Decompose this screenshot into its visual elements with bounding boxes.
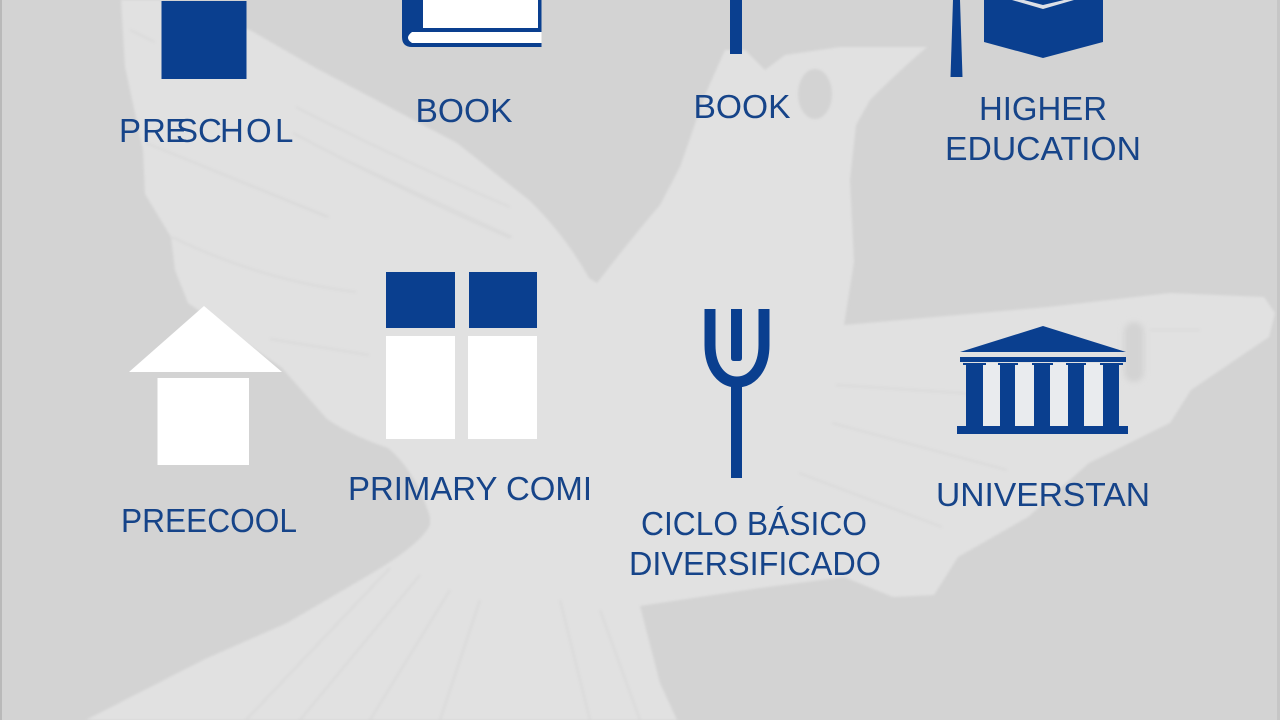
icon: book (402, 0, 542, 47)
icon: blue square (162, 1, 246, 79)
item: book center (694, 0, 790, 125)
icon: stem (730, 0, 742, 54)
label: preschool bottom: PREECOOL (121, 502, 297, 539)
dove eye (798, 69, 832, 119)
label: higher education: HIGHER (979, 90, 1107, 127)
label: university: UNIVERSTAN (936, 476, 1150, 513)
icon: graduation cap (950, 0, 1103, 77)
item: preschool top (119, 1, 293, 149)
item: preschool bottom (121, 306, 297, 539)
label: book: BOOK (416, 92, 512, 129)
item: ciclo basico: DIVERSIFICADO (629, 545, 881, 582)
item: ciclo basico (629, 309, 881, 582)
icon: open book blocks (386, 272, 537, 439)
item: book (402, 0, 542, 129)
label: book center: BOOK (694, 88, 790, 125)
icon: classical building (957, 326, 1128, 434)
dove wing shadow (1124, 322, 1144, 382)
icon: white house (129, 306, 282, 465)
label: ciclo basico: CICLO BÁSICO (641, 505, 867, 542)
item: primary (348, 272, 592, 507)
item: higher education (945, 0, 1141, 167)
item: higher education: EDUCATION (945, 130, 1141, 167)
label: primary: PRIMARY COMI (348, 470, 592, 507)
item: university (936, 326, 1150, 513)
label: preschool top: PRESCHOL (119, 112, 293, 149)
icon: tuning fork (710, 309, 764, 478)
